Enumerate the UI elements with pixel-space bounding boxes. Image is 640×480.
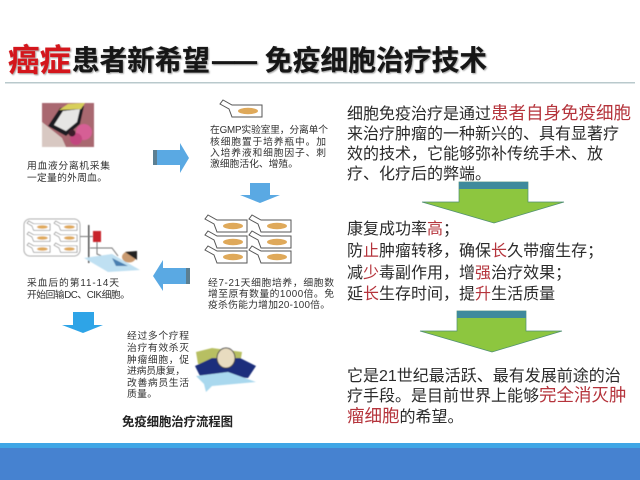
step 2 text: 在GMP实验室里，分离单个 (210, 123, 328, 136)
title: 免疫细胞治疗技术 (265, 45, 487, 76)
step 5 text: 进病员康复， (127, 364, 185, 377)
text block: introduction: 效的技术，它能够弥补传统手术、放 (347, 145, 603, 163)
arrow: green down 1 (422, 182, 564, 223)
step 5 text: 质量。 (127, 388, 157, 400)
step 4 text: 开始回输DC、CIK细胞。 (27, 288, 130, 301)
text block: introduction (347, 103, 631, 183)
text block: benefits: 康复成功率高； (347, 220, 459, 238)
step 4 text (27, 276, 130, 301)
step 2 text: 入培养液和细胞因子、刺 (210, 146, 326, 159)
text block: conclusion: 瘤细胞的希望。 (347, 406, 464, 426)
step 5 text: 经过多个疗程 (127, 329, 189, 342)
step 4 text: 采血后的第11-14天 (27, 276, 119, 289)
step 5 text: 治疗有效杀灭 (127, 341, 189, 354)
step 1 photo: blood bag (42, 103, 94, 147)
step 3 icon: six flasks (205, 215, 291, 263)
step 5 text: 肿瘤细胞，促 (127, 353, 189, 366)
step 3 text: 经7-21天细胞培养，细胞数 (208, 276, 334, 289)
arrow: step 4 to 5 (62, 312, 103, 333)
title: 癌症 (8, 42, 71, 78)
step 5 text: 改善病员生活 (127, 376, 189, 389)
text block: benefits (347, 220, 603, 303)
step 5 text (127, 329, 189, 400)
step 2 text (210, 123, 328, 170)
step 1 text: 一定量的外周血。 (27, 171, 107, 184)
step 1 text: 用血液分离机采集 (27, 159, 110, 172)
step 1 text (27, 159, 110, 184)
step 2 text: 核细胞置于培养瓶中。加 (210, 135, 326, 148)
text block: benefits: 延长生存时间，提升生活质量 (347, 285, 555, 303)
text block: conclusion (347, 367, 627, 426)
step 4 illustration: infusion patient (24, 219, 140, 272)
title: 患者新希望 (72, 45, 210, 76)
text block: conclusion: 疗手段。是目前世界上能够完全消灭肿 (347, 385, 627, 405)
text block: benefits: 防止肿瘤转移，确保长久带瘤生存； (347, 242, 603, 260)
text block: introduction: 来治疗肿瘤的一种新兴的、具有显著疗 (347, 125, 619, 143)
text block: introduction: 细胞免疫治疗是通过患者自身免疫细胞 (347, 103, 631, 123)
title: —— (212, 45, 257, 76)
panel: flow chart (24, 100, 334, 429)
text block: benefits: 减少毒副作用，增强治疗效果； (347, 264, 571, 282)
arrow: step 1 to 2 (153, 143, 189, 173)
arrow: step 3 to 4 (153, 260, 190, 291)
text block: introduction: 疗、化疗后的弊端。 (347, 165, 491, 183)
arrow: step 2 to 3 (240, 183, 280, 203)
step 2 text: 激细胞活化、增殖。 (210, 157, 298, 170)
step 5 illustration: resting patient (195, 348, 256, 392)
step 3 text (208, 276, 334, 311)
footer band (0, 443, 640, 480)
step 2 icon: culture flask (220, 100, 262, 117)
title (8, 42, 487, 78)
step 3 text: 疫杀伤能力增加20-100倍。 (208, 298, 330, 311)
arrow: green down 2 (420, 311, 562, 352)
flow chart caption: 免疫细胞治疗流程图 (122, 414, 233, 429)
step 3 text: 增至原有数量的1000倍。免 (208, 287, 334, 300)
text block: conclusion: 它是21世纪最活跃、最有发展前途的治 (347, 367, 621, 385)
